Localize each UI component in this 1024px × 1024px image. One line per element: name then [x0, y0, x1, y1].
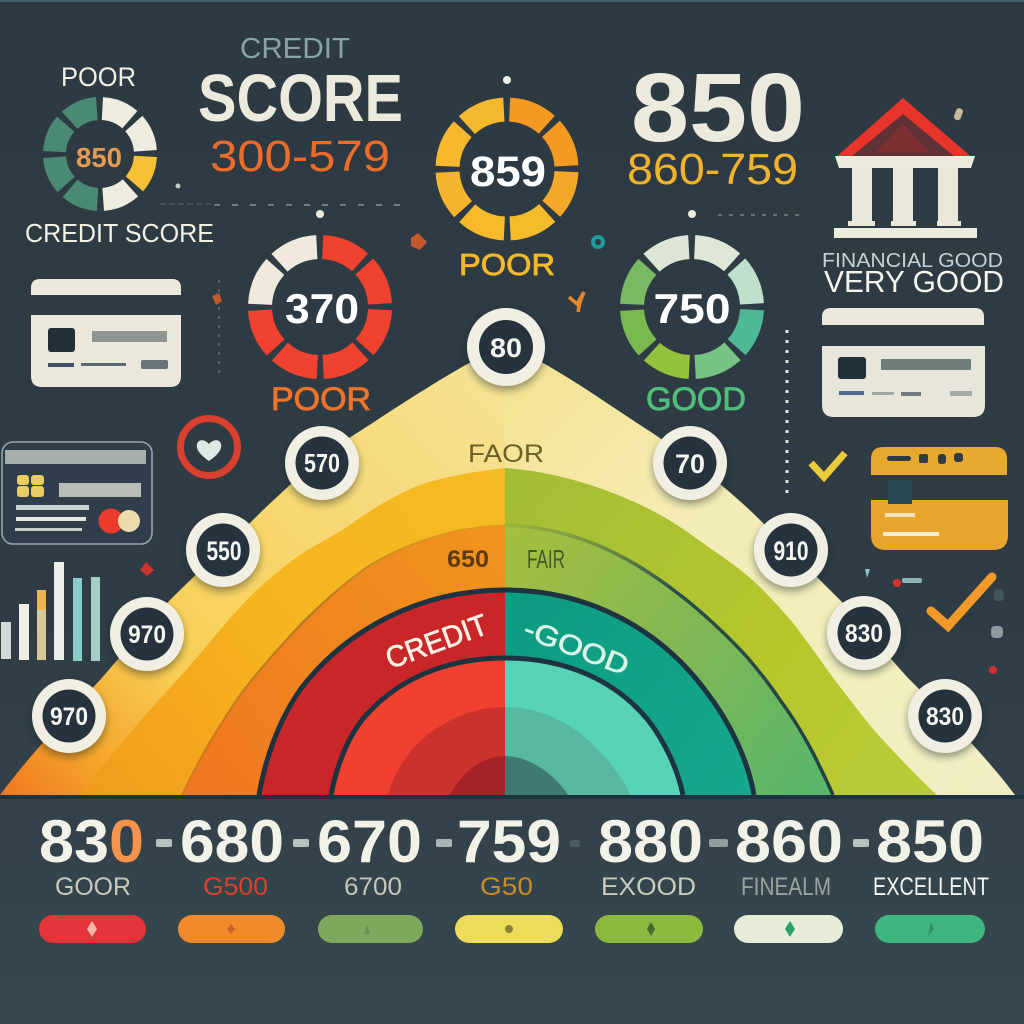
title block [198, 33, 403, 181]
badge 570: 570 [304, 448, 340, 478]
scale labels [55, 873, 989, 901]
frame edge [0, 0, 1024, 2]
score badges [32, 308, 982, 753]
gauge heading: POOR [61, 62, 136, 92]
badge 570 [285, 426, 359, 500]
gauge: poor small [25, 62, 214, 248]
scale labels: 6700 [344, 873, 402, 901]
scale numbers: 830 [39, 808, 144, 875]
scale numbers [39, 808, 984, 875]
badge 910: 910 [774, 536, 808, 566]
arch: orange band left [182, 525, 505, 795]
arch: teal band [505, 590, 754, 795]
scale labels: GOOR [55, 873, 131, 901]
arch label: good: -GOOD [520, 613, 633, 681]
arch base line [0, 795, 1024, 799]
gauge: poor red [235, 222, 405, 417]
arch label: fair right: FAIR [527, 544, 565, 574]
icon: credit card left [31, 279, 181, 387]
score range 300-579: 300-579 [210, 132, 390, 181]
scale numbers: 759 [457, 808, 561, 875]
headline number block [627, 53, 805, 194]
badge 970 [32, 679, 106, 753]
gauge value: 850 [76, 142, 122, 173]
arch label: 650: 650 [447, 546, 489, 573]
gauge value: 370 [285, 285, 359, 332]
scale labels: FINEALM [741, 873, 831, 901]
arch: bright red band [331, 658, 505, 795]
badge 830 last [908, 679, 982, 753]
icon: yellow check mark [811, 453, 845, 477]
scale labels: EXCELLENT [873, 873, 989, 901]
card chip [17, 475, 44, 497]
arch: inner red [388, 707, 505, 795]
gauge caption: POOR [271, 381, 371, 417]
arch: outer band left [0, 345, 505, 795]
gauge caption: CREDIT SCORE [25, 218, 214, 248]
icon: heart in ring [180, 418, 238, 476]
arch label: credit: CREDIT [381, 608, 492, 676]
badge 910 [754, 513, 828, 587]
gauge: good green [607, 222, 777, 417]
badge 830: 830 [845, 620, 883, 648]
big number 850: 850 [631, 53, 805, 162]
badge 30 peak: 80 [490, 333, 522, 363]
badge 70: 70 [675, 449, 705, 479]
gauge caption: POOR [459, 247, 555, 282]
decorative dots [140, 76, 1004, 674]
caption line one: FINANCIAL GOOD [822, 250, 1003, 272]
scale numbers: 670 [317, 808, 422, 875]
icon: credit card yellow [871, 447, 1008, 550]
credit score arch chart [0, 345, 1024, 799]
icon: orange check mark [931, 577, 992, 626]
icon: dark credit card [2, 442, 152, 544]
arch: dark red band [259, 590, 505, 795]
badge 970: 970 [50, 703, 88, 731]
arch: outline outer [259, 590, 754, 795]
bar chart [1, 562, 100, 661]
gauge value: 750 [654, 285, 730, 332]
badge 970 second: 970 [128, 621, 166, 649]
arch: yellow band left [80, 468, 505, 795]
scale labels: G500 [203, 873, 268, 901]
badge 30 peak [467, 308, 545, 386]
scale numbers: 850 [876, 808, 984, 875]
arch: yellow-green band right [505, 468, 937, 795]
arch label: fair: FAOR [468, 440, 544, 468]
scale numbers: 860 [735, 808, 843, 875]
scale numbers: 680 [180, 808, 284, 875]
arch: core red [450, 756, 505, 795]
badge 970 second [110, 597, 184, 671]
scale labels: G50 [480, 873, 533, 901]
badge 550: 550 [206, 536, 242, 566]
scale pills [39, 915, 985, 943]
gauge: poor yellow [423, 85, 591, 282]
gauge caption: GOOD [646, 381, 746, 417]
scale numbers: 880 [598, 808, 703, 875]
badge 830 last: 830 [926, 703, 964, 731]
arch: outer band right [505, 345, 1015, 795]
badge 550 [186, 513, 260, 587]
bottom score scale [39, 808, 989, 943]
scale labels: EXOOD [601, 873, 696, 901]
gauge value: 859 [470, 148, 546, 196]
arch: outline inner [331, 658, 683, 795]
title: credit: CREDIT [240, 33, 350, 65]
arch: core teal [505, 756, 568, 795]
arch: light teal band [505, 658, 683, 795]
icon: credit card right [822, 308, 985, 417]
bank caption [822, 250, 1004, 299]
range 860-759: 860-759 [627, 145, 798, 194]
arch: inner teal [505, 707, 630, 795]
badge 830 [827, 596, 901, 670]
icon: bank building [834, 98, 977, 238]
badge 70 [653, 426, 727, 500]
arch: green band right [505, 525, 833, 795]
title: score: SCORE [198, 61, 403, 136]
caption line two: VERY GOOD [824, 264, 1004, 299]
